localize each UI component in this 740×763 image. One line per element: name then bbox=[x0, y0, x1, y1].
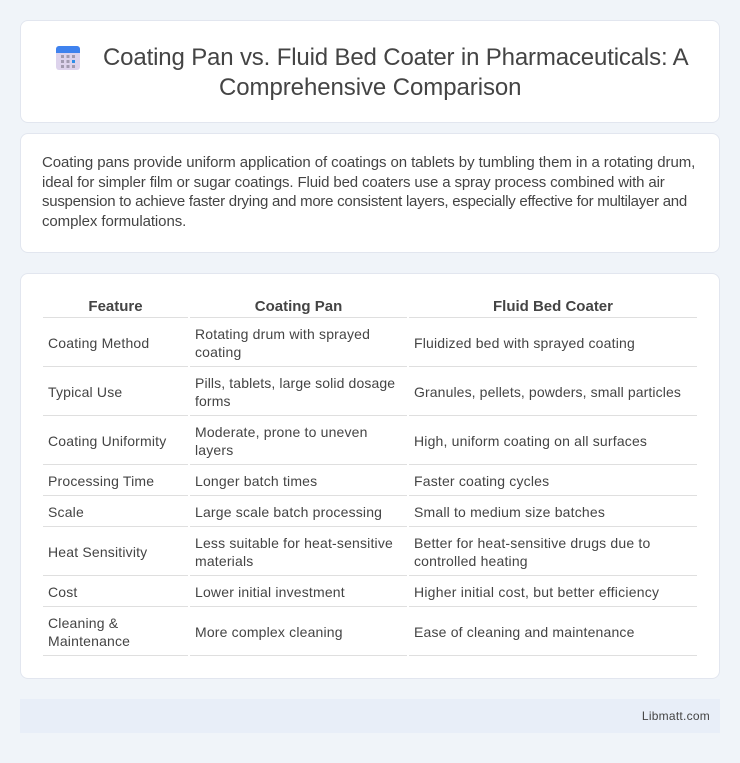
header panel bbox=[20, 20, 720, 123]
intro paragraph: ideal for simpler film or sugar coatings. Fluid bed coaters use a spray process combined with air bbox=[42, 174, 665, 190]
comparison table: Higher initial cost, but better efficiency bbox=[414, 584, 659, 600]
intro paragraph: complex formulations. bbox=[42, 212, 186, 230]
comparison table: controlled heating bbox=[414, 553, 528, 569]
comparison table: Moderate, prone to uneven bbox=[195, 424, 368, 440]
comparison table: Faster coating cycles bbox=[414, 473, 549, 489]
comparison table: Granules, pellets, powders, small particles bbox=[414, 384, 681, 400]
intro paragraph bbox=[42, 154, 695, 230]
row: Cleaning & Maintenance bbox=[48, 615, 130, 649]
comparison table: Fluidized bed with sprayed coating bbox=[414, 335, 635, 351]
comparison table: Longer batch times bbox=[195, 473, 317, 489]
intro paragraph: suspension to achieve faster drying and more consistent layers, especially effective for multilayer and bbox=[42, 193, 687, 210]
comparison table panel bbox=[20, 273, 720, 679]
intro text panel bbox=[20, 133, 720, 253]
row: Cleaning & Maintenance: Maintenance bbox=[48, 633, 130, 649]
comparison table: Better for heat-sensitive drugs due to bbox=[414, 535, 650, 551]
title: Coating Pan vs. Fluid Bed Coater in Pharmaceuticals: A bbox=[103, 44, 689, 71]
row: Scale: Scale bbox=[48, 504, 84, 520]
row: Typical Use: Typical Use bbox=[48, 384, 122, 400]
footer text: Libmatt.com bbox=[642, 709, 710, 723]
comparison table: More complex cleaning bbox=[195, 624, 343, 640]
row: Heat Sensitivity: Heat Sensitivity bbox=[48, 544, 147, 560]
footer bar bbox=[20, 699, 720, 733]
comparison table: Large scale batch processing bbox=[195, 504, 382, 520]
row: Coating Method: Coating Method bbox=[48, 335, 149, 351]
comparison table: forms bbox=[195, 393, 231, 409]
row: Coating Uniformity: Coating Uniformity bbox=[48, 433, 166, 449]
row: Cleaning & Maintenance: Cleaning & bbox=[48, 615, 118, 631]
title: Comprehensive Comparison bbox=[219, 74, 521, 101]
comparison table: Pills, tablets, large solid dosage bbox=[195, 375, 395, 391]
header: Fluid Bed Coater: Fluid Bed Coater bbox=[493, 298, 613, 315]
header: Feature: Feature bbox=[88, 298, 143, 315]
row: Cost: Cost bbox=[48, 584, 78, 600]
comparison table: Small to medium size batches bbox=[414, 504, 605, 520]
header: Coating Pan: Coating Pan bbox=[255, 298, 342, 315]
icon: calendar bbox=[56, 46, 80, 70]
intro paragraph: Coating pans provide uniform application of coatings on tablets by tumbling them in a rotating drum, bbox=[42, 154, 695, 171]
comparison table: Less suitable for heat-sensitive bbox=[195, 535, 393, 551]
comparison table: Ease of cleaning and maintenance bbox=[414, 624, 635, 640]
comparison table: Lower initial investment bbox=[195, 584, 345, 600]
comparison table: Rotating drum with sprayed bbox=[195, 326, 370, 342]
comparison table: layers bbox=[195, 442, 233, 458]
comparison table: materials bbox=[195, 553, 253, 569]
title bbox=[103, 44, 689, 101]
comparison table bbox=[43, 298, 697, 656]
comparison table: High, uniform coating on all surfaces bbox=[414, 433, 647, 449]
row: Processing Time: Processing Time bbox=[48, 473, 154, 489]
comparison table: coating bbox=[195, 344, 241, 360]
